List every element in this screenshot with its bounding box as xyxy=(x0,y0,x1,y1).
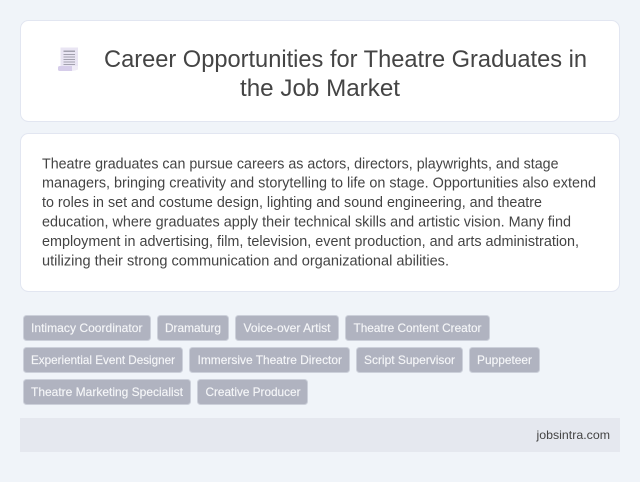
heading xyxy=(104,46,587,102)
tag: Theatre Content Creator xyxy=(346,316,490,340)
heading: the Job Market xyxy=(240,75,400,102)
tag: Script Supervisor: Script Supervisor xyxy=(364,353,455,367)
tag: Puppeteer xyxy=(470,348,540,372)
tag: Immersive Theatre Director xyxy=(190,348,350,372)
tag: Dramaturg: Dramaturg xyxy=(165,321,221,335)
heading: Career Opportunities for Theatre Graduates in xyxy=(104,46,587,73)
tag: Theatre Marketing Specialist xyxy=(24,380,190,404)
description text xyxy=(42,156,596,270)
tag: Script Supervisor xyxy=(356,348,462,372)
description text: to roles in set and costume design, lighting and sound engineering, and theatre xyxy=(42,195,542,211)
description text: managers, bringing creativity and storytelling to life on stage. Opportunities also extend xyxy=(42,176,596,192)
tag list xyxy=(24,316,540,404)
tag: Experiential Event Designer: Experiential Event Designer xyxy=(31,353,175,367)
description panel xyxy=(20,134,620,292)
tag: Theatre Content Creator: Theatre Content Creator xyxy=(354,321,482,335)
tag: Intimacy Coordinator xyxy=(24,316,150,340)
tag: Puppeteer: Puppeteer xyxy=(477,353,532,367)
tag: Theatre Marketing Specialist: Theatre Marketing Specialist xyxy=(31,385,184,399)
tag: Dramaturg xyxy=(158,316,228,340)
description text: utilizing their strong communication and organizational abilities. xyxy=(42,254,449,270)
tag: Creative Producer: Creative Producer xyxy=(206,385,300,399)
tag: Voice-over Artist xyxy=(236,316,338,340)
tag: Creative Producer xyxy=(198,380,308,404)
tag: Experiential Event Designer xyxy=(24,348,182,372)
tag: Immersive Theatre Director: Immersive Theatre Director xyxy=(198,353,342,367)
title panel xyxy=(20,20,620,122)
description text: Theatre graduates can pursue careers as actors, directors, playwrights, and stage xyxy=(42,156,558,172)
icon: script scroll xyxy=(58,48,78,71)
footer bar xyxy=(20,418,620,452)
tag: Intimacy Coordinator: Intimacy Coordinator xyxy=(31,321,142,335)
tag: Voice-over Artist: Voice-over Artist xyxy=(244,321,331,335)
description text: employment in advertising, film, television, event production, and arts administration, xyxy=(42,234,579,250)
footer source text: jobsintra.com xyxy=(535,428,610,442)
description text: education, where graduates apply their technical skills and artistic vision. Many find xyxy=(42,215,571,231)
